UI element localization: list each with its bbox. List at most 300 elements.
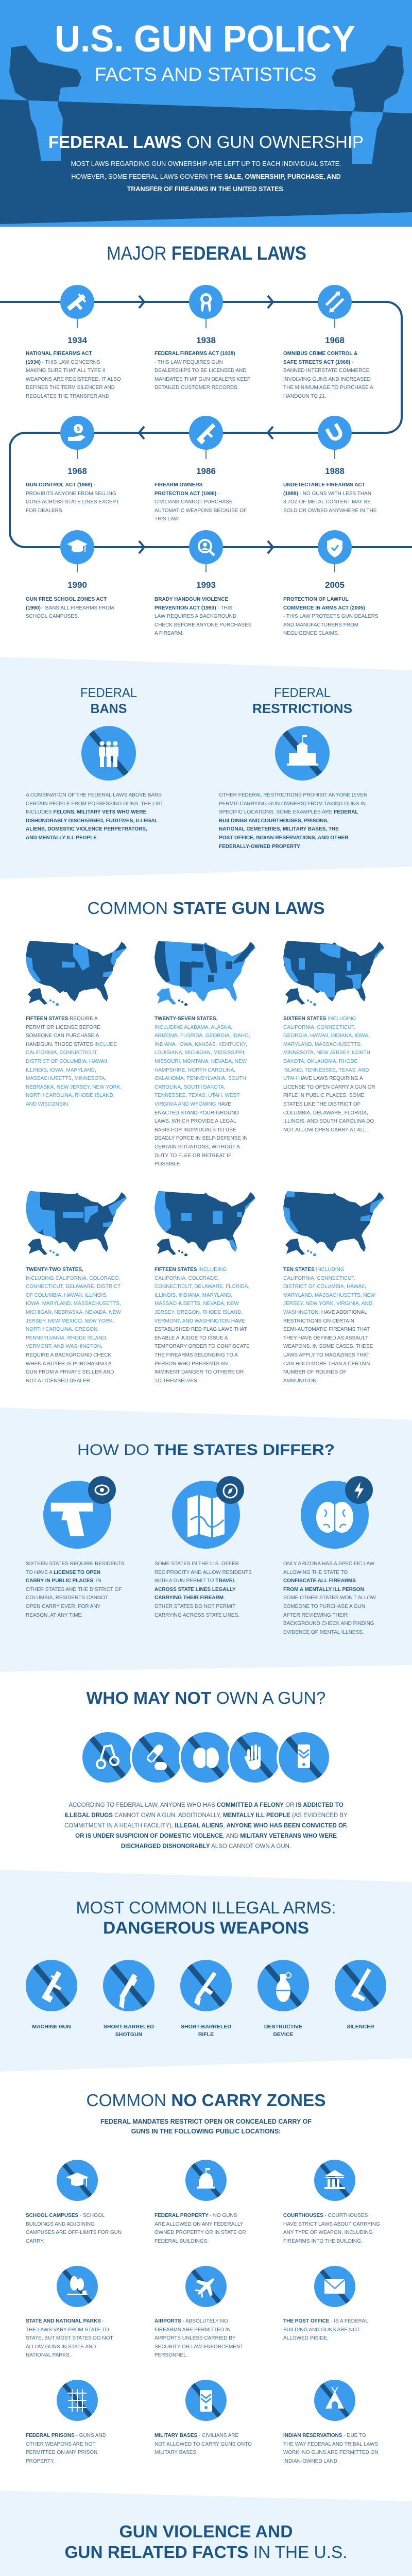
text: map 3 open carry: STATES LIKE THE DISTRICT OF xyxy=(283,1101,360,1107)
text: parks: THE LAWS VARY FROM STATE TO xyxy=(26,2327,109,2333)
text: map 2 stand your ground: OKLAHOMA, PENNSYLVANIA, SOUTH xyxy=(154,1076,246,1081)
intro paragraph: TRANSFER OF FIREARMS IN THE UNITED STATES. xyxy=(127,185,285,193)
text: federal restrictions: OTHER FEDERAL RESTRICTIONS PROHIBIT ANYONE (EVEN xyxy=(219,792,367,798)
text: map 3 open carry: DAKOTA, OKLAHOMA, RHODE xyxy=(283,1059,357,1064)
text: map 6 assault weapons: WEAPONS. IN SOME CASES, THESE xyxy=(283,1344,373,1349)
text: indian reservations xyxy=(283,2433,378,2464)
text: federal restrictions xyxy=(219,792,367,850)
text: map 3 open carry: CALIFORNIA, CONNECTICUT, xyxy=(283,1025,355,1030)
text: military bases: MILITARY BASES. xyxy=(154,2450,198,2455)
map 3 xyxy=(283,941,386,1006)
heading: federal restrictions: RESTRICTIONS xyxy=(252,702,352,716)
text: courthouses xyxy=(283,2213,380,2244)
timeline circles with icons: $ xyxy=(77,426,80,432)
text: no carry subheading xyxy=(100,2118,312,2135)
text: map 6 assault weapons: SEMI-AUTOMATIC FIREARMS THAT xyxy=(283,1327,370,1332)
text: map 4 background checks: JERSEY, NEW MEXICO, NEW YORK, xyxy=(26,1318,114,1324)
heading: how do the states differ: HOW DO THE STATES DIFFER? xyxy=(77,1442,335,1459)
text: open carry license: COLUMBIA, RESIDENTS CANNOT xyxy=(26,1595,108,1601)
text: map 6 assault weapons: JERSEY, NEW YORK, VIRGINIA, AND xyxy=(283,1301,372,1307)
text: post office: ALLOWED INSIDE. xyxy=(283,2335,329,2341)
text: federal bans: A COMBINATION OF THE FEDERAL LAWS ABOVE BANS xyxy=(26,792,162,798)
text: school campuses: SCHOOL CAMPUSES - SCHOOL xyxy=(26,2213,105,2218)
heading: gun violence and gun related facts: GUN VIOLENCE AND xyxy=(119,2522,293,2541)
text: parks: NATIONAL PARKS. xyxy=(26,2352,71,2358)
text: map 5 red flag: ILLINOIS, INDIANA, MARYLAND, xyxy=(154,1293,232,1298)
text: map 5 red flag: VERMONT, AND WASHINGTON HAVE xyxy=(154,1318,245,1324)
text: map 1 permit: AND WISCONSIN. xyxy=(26,1101,69,1107)
timeline text: 1934: REGULATES THE TRANSFER AND xyxy=(26,394,109,399)
timeline text: 1934: DEFINES THE TERM SILENCER AND xyxy=(26,385,115,391)
text: airports: AIRPORTS UNLESS CARRIED BY xyxy=(154,2335,236,2341)
map 5 xyxy=(154,1191,258,1256)
text: map 3 open carry: GEORGIA, HAWAII, INDIANA, IOWA, xyxy=(283,1033,370,1039)
panel background: gun violence facts xyxy=(0,2490,412,2576)
text: airports: SECURITY OR LAW ENFORCEMENT xyxy=(154,2344,243,2350)
timeline text: 2005 xyxy=(283,597,378,636)
subtitle: FACTS AND STATISTICS xyxy=(95,64,316,85)
text: military bases: NOT ALLOWED TO CARRY GUNS ONTO xyxy=(154,2442,252,2447)
text: map 1 permit: CALIFORNIA, CONNECTICUT, xyxy=(26,1050,98,1056)
text: map 4 background checks: CONNECTICUT, DELAWARE, DISTRICT xyxy=(26,1284,121,1290)
text: map 6 assault weapons xyxy=(283,1267,375,1384)
text: arizona: CONFISCATE ALL FIREARMS xyxy=(283,1578,356,1584)
text: no carry subheading: FEDERAL MANDATES RESTRICT OPEN OR CONCEALED CARRY OF xyxy=(100,2118,312,2125)
timeline path xyxy=(0,296,412,572)
icon: pistol with eye badge xyxy=(43,1476,116,1549)
text: reciprocity: CARRYING THEIR FIREARM. xyxy=(154,1595,225,1601)
text: map 2 stand your ground xyxy=(154,1016,250,1167)
text: map 3 open carry xyxy=(283,1016,375,1133)
text: parks: ALLOW GUNS IN STATE AND xyxy=(26,2344,96,2350)
text: map 2 stand your ground: LOUISIANA, MICHIGAN, MISSISSIPPI, xyxy=(154,1050,246,1056)
text: federal bans: ALIENS, DOMESTIC VIOLENCE PERPETRATORS, xyxy=(26,826,147,832)
icons: prohibited persons xyxy=(76,1720,335,1795)
heading: federal restrictions: FEDERAL xyxy=(274,686,331,700)
text: map 3 open carry: RIFLE IN PUBLIC PLACES. SOME xyxy=(283,1093,364,1098)
text: arizona: AFTER REVIEWING THEIR xyxy=(283,1613,348,1618)
icon: left gun silhouette xyxy=(9,45,81,161)
text: reciprocity: RECIPROCITY AND ALLOW RESIDENTS xyxy=(154,1570,252,1575)
text: school campuses: BUILDINGS AND ADJOINING xyxy=(26,2222,95,2227)
intro paragraph xyxy=(71,160,341,193)
text: map 5 red flag: MASSACHUSETTS, NEVADA, NEW xyxy=(154,1301,239,1307)
weapon labels: SHOTGUN xyxy=(115,2031,142,2038)
text: map 6 assault weapons: CALIFORNIA, CONNECTICUT, xyxy=(283,1276,355,1281)
timeline text: 1968 omnibus xyxy=(283,351,373,399)
text: post office: THE POST OFFICE - IS A FEDERAL xyxy=(283,2318,368,2324)
text: map 1 permit: PERMIT OR LICENSE BEFORE xyxy=(26,1025,100,1030)
text: map 2 stand your ground: HAMPSHIRE, NORTH CAROLINA, xyxy=(154,1067,235,1073)
timeline text: 1988: 3.7OZ OF METAL CONTENT MAY BE xyxy=(283,499,371,505)
timeline years: 1988 xyxy=(325,466,345,476)
text: school campuses: CAMPUSES ARE OFF-LIMITS FOR GUN xyxy=(26,2230,122,2235)
text: map 1 permit: SOMEONE CAN PURCHASE A xyxy=(26,1033,99,1039)
text: map 2 stand your ground: DUTY TO FLEE OR RETREAT IF xyxy=(154,1153,231,1158)
text: who may not own a gun: COMMITMENT IN A HEALTH FACILITY), ILLEGAL ALIENS, ANYONE WHO HAS BEEN CONVICTED OF, xyxy=(64,1823,348,1829)
icons: no carry zones xyxy=(53,2150,359,2430)
timeline text: 1988: SOLD OR OWNED ANYWHERE IN THE xyxy=(283,508,377,514)
text: military bases xyxy=(154,2433,252,2455)
text: map 6 assault weapons: THEY HAVE DEFINED AS ASSAULT xyxy=(283,1335,368,1341)
text: prisons xyxy=(26,2433,106,2464)
text: map 2 stand your ground: MISSOURI, MONTANA, NEVADA, NEW xyxy=(154,1059,247,1064)
timeline text: 1934: (1934) - THIS LAW CONCERNS xyxy=(26,360,100,365)
text: indian reservations: INDIAN RESERVATIONS - DUE TO xyxy=(283,2433,366,2438)
text: reciprocity: CARRYING ACROSS STATE LINES. xyxy=(154,1613,239,1618)
text: prisons: OTHER WEAPONS ARE NOT xyxy=(26,2442,96,2447)
text: map 6 assault weapons: WASHINGTON, HAVE ADDITIONAL xyxy=(283,1310,367,1315)
text: who may not own a gun: ACCORDING TO FEDERAL LAW, ANYONE WHO HAS COMMITTED A FELONY OR IS ADDICTED TO xyxy=(68,1802,344,1808)
panel background: illegal arms xyxy=(0,1870,412,2072)
timeline years: 2005 xyxy=(325,580,345,590)
text: federal bans: AND MENTALLY ILL PEOPLE. xyxy=(26,835,98,841)
heading: common state gun laws: COMMON STATE GUN LAWS xyxy=(88,899,324,918)
weapon labels: RIFLE xyxy=(198,2031,214,2038)
text: map 1 permit: NEBRASKA, NEW JERSEY, NEW YORK, xyxy=(26,1084,122,1090)
text: open carry license: SIXTEEN STATES REQUIRE RESIDENTS xyxy=(26,1561,124,1567)
map 1 xyxy=(26,941,129,1006)
text: map 6 assault weapons: LAWS APPLY TO MAGAZINES THAT xyxy=(283,1352,369,1358)
heading: gun violence and gun related facts xyxy=(65,2522,348,2562)
text: open carry license xyxy=(26,1561,124,1618)
timeline years: 1938 xyxy=(196,335,216,345)
text: airports: PERSONNEL. xyxy=(154,2352,187,2358)
text: map 4 background checks: NOT A LICENSED DEALER. xyxy=(26,1378,92,1384)
text: map 4 background checks: OF COLUMBIA, HAWAII, ILLINOIS, xyxy=(26,1293,108,1298)
text: indian reservations: WORK, NO GUNS ARE PERMITTED ON xyxy=(283,2450,378,2455)
text: open carry license: CARRY IN PUBLIC PLACES. IN xyxy=(26,1578,101,1584)
text: federal bans: CERTAIN PEOPLE FROM POSSESSING GUNS. THE LIST xyxy=(26,801,163,807)
text: federal bans xyxy=(26,792,163,841)
text: no carry subheading: GUNS IN THE FOLLOWING PUBLIC LOCATIONS: xyxy=(131,2128,281,2135)
text: map 2 stand your ground: BASIS FOR INDIVIDUALS TO USE xyxy=(154,1127,236,1133)
text: map 3 open carry: LICENSE TO OPEN CARRY A GUN OR xyxy=(283,1084,375,1090)
timeline text: 1968 gun control: GUNS ACROSS STATE LINES EXCEPT xyxy=(26,499,119,505)
timeline text: 2005: - THIS LAW PROTECTS GUN DEALERS xyxy=(283,614,378,619)
text: map 3 open carry: ILLINOIS, AND SOUTH CAROLINA DO xyxy=(283,1118,374,1124)
map 2 xyxy=(154,941,258,1006)
timeline years: 1968 xyxy=(325,335,345,345)
text: map 5 red flag: CONNECTICUT, DELAWARE, FLORIDA, xyxy=(154,1284,249,1290)
text: courthouses: FIREARMS INTO THE BUILDING. xyxy=(283,2239,363,2244)
text: arizona xyxy=(283,1561,376,1635)
heading: federal laws on gun ownership: FEDERAL LAWS ON GUN OWNERSHIP xyxy=(48,132,364,151)
text: post office: BUILDING AND GUNS ARE NOT xyxy=(283,2327,360,2333)
text: map 5 red flag: ENABLE A JUDGE TO ISSUE A xyxy=(154,1335,228,1341)
timeline text: 1968 omnibus: THE MINIMUM AGE TO PURCHASE A xyxy=(283,385,373,391)
panel background: federal bans & restrictions xyxy=(0,657,412,879)
text: map 6 assault weapons: TEN STATES INCLUDING xyxy=(283,1267,345,1273)
icon: brain with lightning badge xyxy=(301,1476,373,1549)
text: airports xyxy=(154,2318,243,2358)
text: map 1 permit: DISTRICT OF COLUMBIA, HAWAII, xyxy=(26,1059,109,1064)
text: who may not own a gun: ILLEGAL DRUGS CANNOT OWN A GUN. ADDITIONALLY, MENTALLY ILL PEOPLE (AS EVIDENCED BY xyxy=(64,1812,348,1819)
text: reciprocity: SOME STATES IN THE U.S. OFFER xyxy=(154,1561,239,1567)
timeline years: 1934 xyxy=(67,335,87,345)
text: prisons: PERMITTED ON ANY PRISON xyxy=(26,2450,97,2455)
text: federal bans: INCLUDES FELONS, MILITARY VETS WHO WERE xyxy=(26,809,146,815)
text: reciprocity: WITH A GUN PERMIT TO TRAVEL xyxy=(154,1578,236,1584)
weapon labels: SHORT-BARRELED xyxy=(181,2024,231,2030)
text: map 3 open carry: MARYLAND, MASSACHUSETTS, xyxy=(283,1042,362,1047)
text: courthouses: ANY TYPE OF WEAPON, INCLUDING xyxy=(283,2230,373,2235)
heading: common no carry zones: COMMON NO CARRY ZONES xyxy=(87,2091,326,2110)
text: federal property: ARE ALLOWED ON ANY FEDERALLY xyxy=(154,2222,243,2227)
timeline text: 1986: THIS LAW. xyxy=(154,516,180,522)
icon: map with compass badge xyxy=(172,1476,244,1549)
header background xyxy=(0,0,412,227)
text: map 2 stand your ground: DEADLY FORCE IN SELF-DEFENSE IN xyxy=(154,1136,248,1141)
icon: right gun silhouette xyxy=(332,45,404,164)
text: map 2 stand your ground: ARIZONA, FLORIDA, GEORGIA, IDAHO, xyxy=(154,1033,250,1039)
text: open carry license: REASON, AT ANY TIME. xyxy=(26,1613,83,1618)
text: parks: STATE, BUT MOST STATES DO NOT xyxy=(26,2335,113,2341)
text: parks: STATE AND NATIONAL PARKS - xyxy=(26,2318,104,2324)
text: map 6 assault weapons: NUMBER OF ROUNDS OF xyxy=(283,1369,347,1375)
text: indian reservations: INDIAN-OWNED LAND. xyxy=(283,2459,339,2464)
text: courthouses: HAVE STRICT LAWS ABOUT CARRYING xyxy=(283,2222,380,2227)
heading: federal bans: BANS xyxy=(91,702,127,716)
text: map 3 open carry: ISLAND, TENNESSEE, TEXAS, AND xyxy=(283,1067,369,1073)
text: open carry license: TO HAVE A LICENSE TO OPEN xyxy=(26,1570,100,1575)
text: map 2 stand your ground: TENNESSEE, TEXAS, UTAH, WEST xyxy=(154,1093,239,1098)
text: map 5 red flag: TEMPORARY ORDER TO CONFISCATE xyxy=(154,1344,250,1349)
timeline text: 1968 gun control: PROHIBITS ANYONE FROM SELLING xyxy=(26,491,116,497)
timeline text: 1990: SCHOOL CAMPUSES. xyxy=(26,614,79,619)
timeline text: 1938: MANDATES THAT GUN DEALERS KEEP xyxy=(154,377,251,382)
text: federal restrictions: FEDERALLY-OWNED PROPERTY. xyxy=(219,844,302,850)
text: map 5 red flag: ESTABLISHED RED FLAG LAWS THAT xyxy=(154,1327,247,1332)
text: map 1 permit: HANDGUN. THOSE STATES INCLUDE xyxy=(26,1042,117,1047)
weapon labels: DESTRUCTIVE xyxy=(264,2024,302,2030)
timeline years xyxy=(67,335,345,590)
timeline text: 1968 omnibus: BANNED INTERSTATE COMMERCE xyxy=(283,368,369,374)
timeline text: 1938: FEDERAL FIREARMS ACT (1938) xyxy=(154,351,235,357)
timeline text: 1986 xyxy=(154,482,247,522)
text: map 6 assault weapons: DISTRICT OF COLUMBIA, HAWAII, xyxy=(283,1284,366,1290)
text: post office xyxy=(283,2318,368,2341)
timeline text: 1993: A FIREARM. xyxy=(154,631,184,636)
text: map 5 red flag: TO THEMSELVES. xyxy=(154,1378,199,1384)
text: federal property: FEDERAL PROPERTY - NO GUNS xyxy=(154,2213,237,2218)
text: map 2 stand your ground: CAROLINA, SOUTH DAKOTA, xyxy=(154,1084,226,1090)
text: map 1 permit: ILLINOIS, IOWA, MARYLAND, xyxy=(26,1067,96,1073)
timeline text: 1938 xyxy=(154,351,251,391)
text: map 4 background checks: MICHIGAN, NEBRASKA, NEVADA, NEW xyxy=(26,1310,121,1315)
text: federal property: OWNED PROPERTY OR IN STATE OR xyxy=(154,2230,246,2235)
text: map 2 stand your ground: INDIANA, IOWA, KANSAS, KENTUCKY, xyxy=(154,1042,247,1047)
timeline text: 1990: (1990) - BANS ALL FIREARMS FROM xyxy=(26,605,114,611)
timeline text: 1993 xyxy=(154,597,251,636)
heading: most common illegal arms: DANGEROUS WEAPONS xyxy=(103,1918,309,1937)
text: arizona: BACKGROUND CHECK AND FINDING xyxy=(283,1621,374,1626)
timeline text: 1988: UNDETECTABLE FIREARMS ACT xyxy=(283,482,365,488)
text: arizona: FROM A MENTALLY ILL PERSON. xyxy=(283,1587,365,1592)
text: map 4 background checks: WHEN A BUYER IS PURCHASING A xyxy=(26,1361,112,1367)
text: map 5 red flag: THE FIREARMS BELONGING TO A xyxy=(154,1352,238,1358)
text: reciprocity: ACROSS STATE LINES LEGALLY xyxy=(154,1587,236,1592)
timeline text: 1968 omnibus: INVOLVING GUNS AND INCREASED xyxy=(283,377,371,382)
weapon labels: MACHINE GUN xyxy=(32,2024,71,2030)
text: federal bans: DISHONORABLY DISCHARGED, FUGITIVES, ILLEGAL xyxy=(26,818,158,824)
icons: dangerous weapons xyxy=(21,1948,391,2023)
timeline text: 1968 omnibus: HANDGUN TO 21. xyxy=(283,394,327,399)
intro paragraph: HOWEVER, SOME FEDERAL LAWS GOVERN THE SALE, OWNERSHIP, PURCHASE, AND xyxy=(71,173,341,180)
text: airports: FIREARMS ARE PERMITTED IN xyxy=(154,2327,231,2333)
text: map 6 assault weapons: AMMUNITION. xyxy=(283,1378,318,1384)
heading: major federal laws: MAJOR FEDERAL LAWS xyxy=(107,243,306,264)
text: reciprocity xyxy=(154,1561,252,1618)
text: federal restrictions: PERMIT-CARRYING GUN OWNERS) FROM TAKING GUNS IN xyxy=(219,801,366,807)
timeline years: 1968 xyxy=(67,466,87,476)
text: federal restrictions: NATIONAL CEMETERIES, MILITARY BASES, THE xyxy=(219,826,339,832)
text: map 4 background checks: GUN FROM A PRIVATE SELLER AND xyxy=(26,1369,114,1375)
text: federal restrictions: POST OFFICE, INDIAN RESERVATIONS, AND OTHER xyxy=(219,835,348,841)
text: arizona: ONLY ARIZONA HAS A SPECIFIC LAW xyxy=(283,1561,374,1567)
map 6 xyxy=(283,1191,386,1256)
timeline text: 1993: BRADY HANDGUN VIOLENCE xyxy=(154,597,228,602)
text: map 4 background checks: IOWA, MARYLAND, MASSACHUSETTS, xyxy=(26,1301,121,1307)
text: map 2 stand your ground: TWENTY-SEVEN STATES, xyxy=(154,1016,217,1022)
text: map 4 background checks: VERMONT, AND WASHINGTON, xyxy=(26,1344,102,1349)
text: map 6 assault weapons: MARYLAND, MASSACHUSETTS, NEW xyxy=(283,1293,375,1298)
text: arizona: EVIDENCE OF MENTAL ILLNESS. xyxy=(283,1630,364,1635)
timeline text: 1993: CHECK BEFORE ANYONE PURCHASES xyxy=(154,622,251,628)
text: courthouses: COURTHOUSES - COURTHOUSES xyxy=(283,2213,368,2218)
weapon labels: DEVICE xyxy=(273,2031,294,2038)
timeline text: 1938: DETAILED CUSTOMER RECORDS. xyxy=(154,385,239,391)
timeline text: 1993: PREVENTION ACT (1993) - THIS xyxy=(154,605,232,611)
panel background: how do the states differ xyxy=(0,1408,412,1672)
map 4 xyxy=(26,1191,129,1256)
text: map 1 permit: FIFTEEN STATES REQUIRE A xyxy=(26,1016,98,1022)
text: map 2 stand your ground: VIRGINIA AND WYOMING HAVE xyxy=(154,1101,231,1107)
timeline text: 2005: PROTECTION OF LAWFUL xyxy=(283,597,349,602)
title: U.S. GUN POLICY xyxy=(55,19,355,60)
timeline years: 1990 xyxy=(67,580,87,590)
timeline text: 1968 gun control: GUN CONTROL ACT (1968) - xyxy=(26,482,95,488)
text: who may not own a gun xyxy=(64,1802,348,1850)
text: map 6 assault weapons: RESTRICTIONS ON CERTAIN xyxy=(283,1318,354,1324)
text: map 2 stand your ground: LAWS, WHICH PROVIDE A LEGAL xyxy=(154,1118,236,1124)
text: open carry license: OTHER STATES AND THE DISTRICT OF xyxy=(26,1587,122,1592)
timeline text: 1968 gun control: FOR DEALERS. xyxy=(26,508,63,514)
timeline text: 1968 omnibus: SAFE STREETS ACT (1968) - xyxy=(283,360,353,365)
text: reciprocity: OTHER STATES DO NOT PERMIT xyxy=(154,1604,235,1609)
timeline text: 1938: DEALERSHIPS TO BE LICENSED AND xyxy=(154,368,247,374)
icon: banned building xyxy=(269,714,335,792)
text: parks xyxy=(26,2318,113,2358)
timeline years: 1986 xyxy=(196,466,216,476)
timeline text: 1993: LAW REQUIRES A BACKGROUND xyxy=(154,614,236,619)
text: map 1 permit: NORTH CAROLINA, RHODE ISLAND, xyxy=(26,1093,115,1098)
text: map 3 open carry: UTAH HAVE LAWS REQUIRING A xyxy=(283,1076,363,1081)
heading: federal bans: FEDERAL xyxy=(80,686,137,700)
timeline text: 1988 xyxy=(283,482,377,514)
heading: gun violence and gun related facts: GUN RELATED FACTS IN THE U.S. xyxy=(65,2543,348,2562)
timeline text: 1968 omnibus: OMNIBUS CRIME CONTROL & xyxy=(283,351,357,357)
text: map 3 open carry: SIXTEEN STATES INCLUDING xyxy=(283,1016,356,1022)
text: map 2 stand your ground: INCLUDING ALABAMA, ALASKA, xyxy=(154,1025,232,1030)
text: map 3 open carry: COLUMBIA, DELAWARE, FLORIDA, xyxy=(283,1110,368,1116)
text: map 2 stand your ground: ENACTED STAND-YOUR-GROUND xyxy=(154,1110,239,1116)
text: who may not own a gun: DISCHARGED DISHONORABLY ALSO CANNOT OWN A GUN. xyxy=(121,1843,291,1850)
timeline text: 1968 gun control xyxy=(26,482,119,514)
text: map 3 open carry: MINNESOTA, NEW JERSEY, NORTH xyxy=(283,1050,370,1056)
timeline text: 1990 xyxy=(26,597,114,619)
timeline text: 1934: WEAPONS ARE REGISTERED. IT ALSO xyxy=(26,377,121,382)
text: airports: AIRPORTS - ABSOLUTELY NO xyxy=(154,2318,228,2324)
timeline text: 1986: PROTECTION ACT (1986) - xyxy=(154,491,219,497)
text: map 2 stand your ground: CERTAIN SITUATIONS, WITHOUT A xyxy=(154,1144,240,1150)
text: map 4 background checks: TWENTY-TWO STATES, xyxy=(26,1267,83,1273)
text: map 5 red flag: CALIFORNIA, COLORADO, xyxy=(154,1276,219,1281)
text: indian reservations: THE WAY FEDERAL AND TRIBAL LAWS xyxy=(283,2442,378,2447)
heading: most common illegal arms: MOST COMMON ILLEGAL ARMS: xyxy=(76,1898,336,1917)
text: school campuses: CARRY. xyxy=(26,2239,44,2244)
text: prisons: PROPERTY. xyxy=(26,2459,55,2464)
text: map 4 background checks xyxy=(26,1267,121,1384)
text: map 1 permit xyxy=(26,1016,122,1107)
text: who may not own a gun: OR IS UNDER SUSPICION OF DOMESTIC VIOLENCE, AND MILITARY VETERANS WHO WERE xyxy=(75,1833,337,1839)
heading: federal restrictions xyxy=(252,686,352,716)
timeline text: 1934: MAKING SURE THAT ALL TYPE II xyxy=(26,368,105,374)
text: arizona: SOMEONE TO PURCHASE A GUN xyxy=(283,1604,365,1609)
weapon labels xyxy=(32,2024,374,2038)
text: map 5 red flag: PERSON WHO PRESENTS AN xyxy=(154,1361,228,1367)
text: map 6 assault weapons: CAN HOLD MORE THAN A CERTAIN xyxy=(283,1361,370,1367)
text: map 4 background checks: REQUIRE A BACKGROUND CHECK xyxy=(26,1352,111,1358)
timeline text: 1986: CIVILIANS CANNOT PURCHASE xyxy=(154,499,233,505)
text: arizona: SOME OTHER STATES WON'T ALLOW xyxy=(283,1595,376,1601)
timeline years: 1993 xyxy=(196,580,216,590)
text: map 5 red flag: JERSEY, OREGON, RHODE ISLAND, xyxy=(154,1310,243,1315)
text: map 5 red flag: IMMINENT DANGER TO OTHERS OR xyxy=(154,1369,244,1375)
text: school campuses xyxy=(26,2213,122,2244)
timeline text: 2005: COMMERCE IN ARMS ACT (2005) xyxy=(283,605,365,611)
text: open carry license: OPEN CARRY EVER, FOR ANY xyxy=(26,1604,100,1609)
text: map 4 background checks: NORTH CAROLINA, OREGON, xyxy=(26,1327,99,1332)
timeline circles with icons xyxy=(60,285,352,564)
timeline text: 1986: FIREARM OWNERS xyxy=(154,482,202,488)
text: military bases: MILITARY BASES - CIVILIANS ARE xyxy=(154,2433,238,2438)
text: map 3 open carry: NOT ALLOW OPEN CARRY AT ALL. xyxy=(283,1127,368,1133)
text: federal property: FEDERAL BUILDINGS. xyxy=(154,2239,209,2244)
text: map 4 background checks: PENNSYLVANIA, RHODE ISLAND, xyxy=(26,1335,108,1341)
text: map 5 red flag: FIFTEEN STATES INCLUDING xyxy=(154,1267,227,1273)
timeline text: 2005: AND MANUFACTURERS FROM xyxy=(283,622,358,628)
text: map 4 background checks: INCLUDING CALIFORNIA, COLORADO, xyxy=(26,1276,120,1281)
timeline text: 2005: NEGLIGENCE CLAIMS. xyxy=(283,631,339,636)
timeline text: 1990: GUN FREE SCHOOL ZONES ACT xyxy=(26,597,107,602)
text: prisons: FEDERAL PRISONS - GUNS AND xyxy=(26,2433,106,2438)
weapon labels: SHORT-BARRELED xyxy=(104,2024,154,2030)
icon: banned people xyxy=(76,714,142,792)
text: map 5 red flag xyxy=(154,1267,250,1384)
text: map 1 permit: MASSACHUSETTS, MINNESOTA, xyxy=(26,1076,106,1081)
intro paragraph: MOST LAWS REGARDING GUN OWNERSHIP ARE LEFT UP TO EACH INDIVIDUAL STATE. xyxy=(71,160,341,167)
timeline text: 1934 xyxy=(26,351,121,399)
timeline text: 1988: (1988) - NO GUNS WITH LESS THAN xyxy=(283,491,371,497)
text: map 2 stand your ground: POSSIBLE. xyxy=(154,1161,181,1167)
text: federal property xyxy=(154,2213,246,2244)
text: arizona: ALLOWING THE STATE TO xyxy=(283,1570,348,1575)
heading: who may not own a gun: WHO MAY NOT OWN A GUN? xyxy=(87,1688,325,1707)
weapon labels: SILENCER xyxy=(347,2024,374,2030)
timeline text: 1934: NATIONAL FIREARMS ACT xyxy=(26,351,92,357)
timeline text: 1986: AUTOMATIC WEAPONS BECAUSE OF xyxy=(154,508,247,514)
